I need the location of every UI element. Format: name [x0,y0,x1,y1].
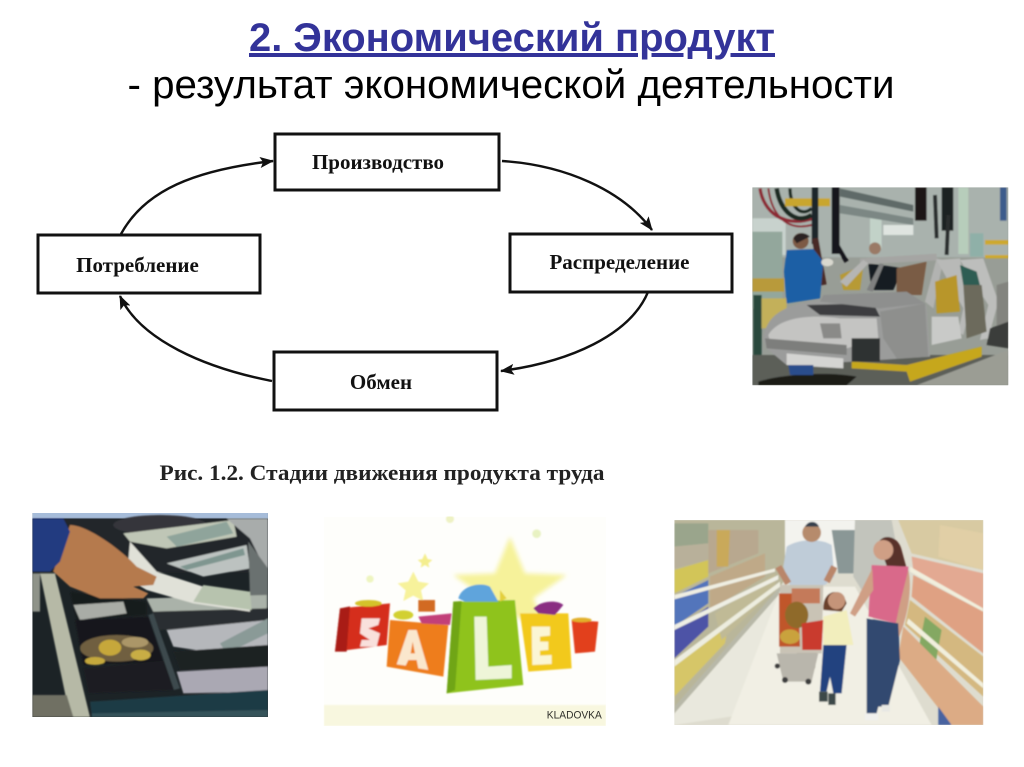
box: exchange [274,352,497,410]
arrow: exchange to consumption [120,296,272,381]
cycle diagram [38,134,732,410]
watermark: KLADOVKA [547,709,603,721]
photo: cash drawer [32,513,268,717]
box: distribution [510,234,732,292]
photo: family in supermarket [674,520,983,725]
box: exchange: Обмен [350,370,412,394]
arrow: distribution to exchange [501,292,648,371]
figure caption: Рис. 1.2. Стадии движения продукта труда [160,460,604,485]
box: production: Производство [312,150,444,174]
box: production [275,134,499,190]
arrow: production to distribution [502,161,652,230]
arrow: consumption to production [121,161,273,234]
box: distribution: Распределение [549,250,690,274]
photo: car factory [752,187,1008,385]
title: 2. Экономический продукт [249,16,775,60]
box: consumption: Потребление [76,253,199,277]
box: consumption [38,235,260,293]
subtitle: - результат экономической деятельности [128,63,894,107]
photo: sale bags [324,515,606,726]
